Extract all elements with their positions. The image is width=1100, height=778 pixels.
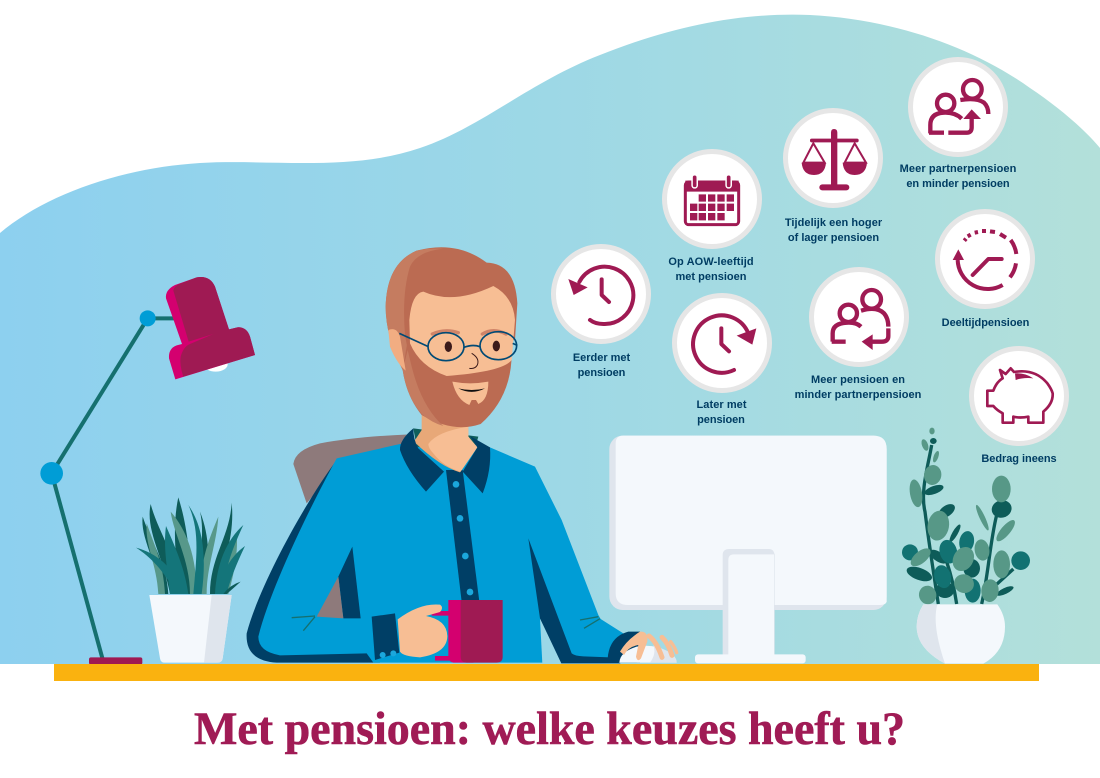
label: Op AOW-leeftijd: [668, 256, 754, 268]
label: [696, 399, 747, 426]
pot: [149, 595, 232, 663]
label: [900, 163, 1017, 190]
shirt blue: [258, 444, 637, 663]
hair: [386, 247, 517, 370]
lamp base: [89, 657, 142, 665]
pot: [917, 604, 1005, 664]
collar left: [400, 428, 444, 492]
right hand on mouse: [608, 632, 677, 663]
chair: [293, 434, 410, 503]
dark leaves: [905, 438, 1015, 598]
fingers: [649, 636, 677, 657]
glasses: [399, 332, 517, 361]
label: Tijdelijk een hoger: [785, 217, 883, 229]
lamp arms: [52, 318, 175, 659]
monitor screen: [616, 436, 887, 605]
beard: [403, 337, 512, 427]
icon: piggy bank: [972, 348, 1066, 444]
collar right: [463, 436, 490, 493]
plant right: [902, 428, 1030, 664]
monitor: [609, 436, 887, 663]
dark leaves: [142, 497, 232, 594]
desk: [54, 664, 1039, 681]
icon: two people arrow back: [812, 270, 906, 364]
mid leaves: [902, 530, 1030, 603]
label: [785, 217, 883, 244]
option: deeltijdpensioen: [938, 212, 1032, 329]
smile: [458, 388, 485, 392]
pot shade: [917, 604, 945, 664]
icon: part-time clock: [938, 212, 1032, 306]
shirt gap to background: [540, 618, 562, 663]
beard highlight: [403, 350, 443, 426]
label: pensioen: [697, 414, 745, 426]
plant tips left: [292, 616, 315, 631]
mug dark side: [461, 600, 503, 663]
light leaves: [147, 512, 237, 594]
label: [573, 352, 630, 379]
pot shade: [204, 595, 232, 663]
lamp bulb: [204, 357, 228, 372]
label: en minder pensioen: [906, 178, 1010, 190]
left cuff: [372, 613, 399, 660]
option: later met pensioen: [674, 296, 770, 426]
cuff: [608, 632, 640, 663]
label: minder partnerpensioen: [795, 389, 922, 401]
nose: [469, 353, 478, 369]
chin skin: [452, 382, 488, 405]
cuff buttons: [380, 650, 396, 658]
shirt navy outline: [247, 460, 380, 663]
lamp joints: [40, 310, 156, 485]
icon: scales: [786, 110, 880, 206]
chair under arm: [317, 577, 343, 618]
mouse: [619, 646, 677, 663]
mug: [448, 600, 473, 663]
mouse shade: [650, 645, 677, 663]
neck: [414, 407, 477, 472]
shirt buttons: [453, 481, 473, 595]
mid leaves: [136, 505, 245, 594]
label: Deeltijdpensioen: [942, 317, 1030, 329]
thumb and back of hand: [620, 632, 647, 660]
eyes: [445, 341, 500, 352]
plant left: [136, 497, 245, 663]
plant tips right: [580, 617, 600, 628]
stand foot: [695, 654, 806, 663]
label: [795, 374, 922, 401]
mug handle: [432, 613, 450, 658]
label: Meer pensioen en: [811, 374, 905, 386]
option: op AOW-leeftijd: [664, 152, 760, 283]
option: eerder met pensioen: [554, 246, 648, 379]
label: Eerder met: [573, 352, 630, 364]
label: [668, 256, 754, 283]
title: Met pensioen: welke keuzes heeft u?: [194, 703, 905, 755]
hair highlight: [386, 249, 443, 370]
left underarm shadow: [338, 547, 361, 618]
option: meer pensioen: [795, 270, 922, 401]
label: Later met: [696, 399, 747, 411]
face: [409, 286, 515, 376]
light leaves: [908, 428, 1018, 606]
option: tijdelijk hoger of lager: [785, 110, 883, 244]
option: meer partnerpensioen: [900, 60, 1017, 190]
stand shadow: [723, 549, 775, 658]
label: met pensioen: [676, 271, 747, 283]
lamp shade dark side: [173, 277, 255, 377]
person: [247, 247, 637, 663]
hand on mug: [398, 604, 447, 657]
eyebrows: [432, 331, 506, 334]
label: Bedrag ineens: [981, 453, 1057, 465]
icon: two people arrow up: [910, 60, 1006, 154]
neck light: [428, 427, 477, 472]
monitor frame: [609, 436, 887, 610]
ear: [388, 329, 406, 371]
button placket: [446, 470, 479, 602]
icon: calendar: [664, 152, 760, 246]
desk lamp: [40, 277, 255, 665]
label: of lager pensioen: [788, 232, 879, 244]
icon: clock backwards: [554, 246, 648, 342]
option: bedrag ineens: [972, 348, 1066, 465]
label: Meer partnerpensioen: [900, 163, 1017, 175]
label: pensioen: [578, 367, 626, 379]
lamp shade pink side: [166, 277, 255, 379]
stand: [728, 554, 774, 658]
icon: clock forwards: [674, 296, 770, 390]
stems: [923, 445, 1013, 604]
inner collar: [413, 428, 478, 453]
right sleeve shadow: [528, 538, 621, 663]
